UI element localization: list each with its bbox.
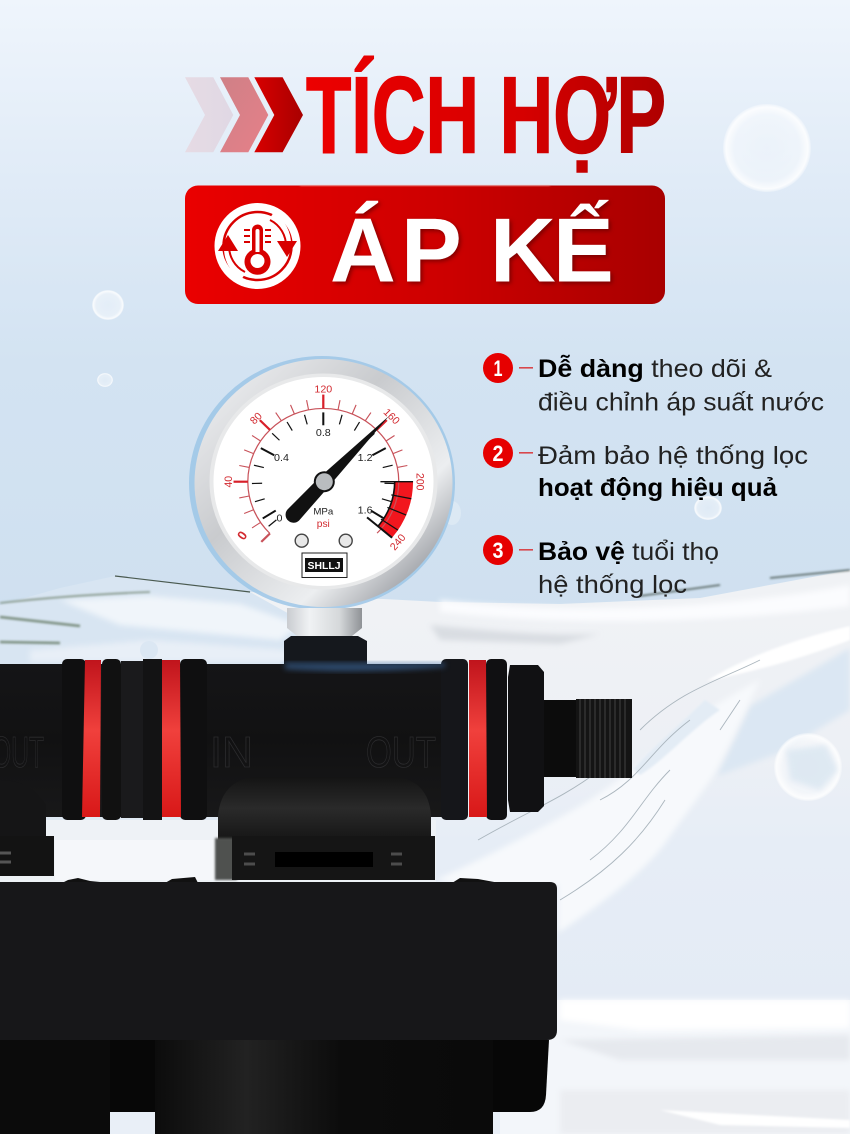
gauge psi labels: 120 [314, 384, 332, 396]
gauge psi scale [217, 378, 430, 585]
banner text: ÁP KẾ [330, 200, 614, 302]
list item 2: 2 [492, 441, 504, 466]
bubbles [92, 104, 842, 801]
gauge MPa labels: 1.6 [358, 505, 373, 516]
filter housing product [0, 608, 632, 1134]
filter cylinder left [0, 1040, 110, 1134]
gauge logo: SHLLJ [308, 560, 341, 572]
gauge psi labels: 240 [388, 532, 409, 553]
gauge MPa labels: 0.8 [316, 427, 331, 439]
embossed labels: IN [210, 728, 253, 777]
icon: thermometer with rotating arrows [214, 203, 300, 289]
list item 2 [483, 438, 808, 502]
list item 3: Bảo vệ tuổi thọ [538, 538, 719, 566]
gauge psi labels: 200 [414, 473, 426, 490]
list item 1 [483, 353, 824, 416]
list item 1: Dễ dàng theo dõi & [538, 353, 772, 383]
list item 2: Đảm bảo hệ thống lọc [538, 442, 808, 470]
gauge MPa scale [252, 412, 395, 526]
pressure gauge [189, 356, 455, 610]
gauge psi labels: 80 [248, 410, 265, 427]
swoosh blue zone [717, 648, 850, 776]
left elbow [0, 780, 54, 876]
embossed labels [0, 728, 436, 777]
gauge psi labels: 40 [223, 476, 235, 487]
gauge screws [295, 534, 352, 547]
mounting clips [62, 877, 505, 884]
gauge red zone [378, 482, 413, 538]
gauge psi labels: 160 [381, 406, 402, 427]
list item 2: hoạt động hiệu quả [538, 474, 778, 502]
gauge logo [302, 553, 347, 578]
gauge MPa labels: 1.2 [358, 452, 373, 464]
filter head block [0, 882, 557, 1040]
gauge MPa labels: MPa [313, 506, 334, 517]
list item 3: 3 [492, 538, 504, 563]
list item 1: 1 [494, 356, 502, 381]
gauge psi labels [223, 384, 426, 553]
list item 3: hệ thống lọc [538, 571, 687, 599]
gauge needle [286, 416, 389, 523]
end nut [508, 665, 544, 812]
title arrows [185, 77, 303, 152]
gauge MPa labels: 0.4 [274, 452, 289, 464]
red bands [82, 660, 487, 817]
swoosh white ribbon [436, 680, 760, 933]
main pipe [0, 659, 507, 820]
gauge connector [284, 608, 367, 672]
list item 3 [483, 535, 719, 599]
blue glow [285, 663, 445, 671]
threaded outlet [544, 699, 632, 778]
gauge MPa labels: 0 [276, 512, 283, 524]
central elbow [215, 777, 435, 880]
gauge psi labels: 0 [234, 528, 250, 543]
title: TÍCH HỢP: TÍCH HỢP [306, 54, 666, 176]
rear filter block [105, 1040, 549, 1112]
list item 1: điều chỉnh áp suất nước [538, 388, 824, 416]
gauge MPa labels [274, 427, 373, 524]
embossed labels: OUT [366, 728, 436, 777]
filter cylinder centre [155, 1040, 493, 1134]
gauge red zone ticks [367, 482, 413, 538]
banner: ÁP KẾ [185, 185, 665, 304]
swoosh white ribbon top [707, 626, 850, 681]
gauge psi labels: psi [317, 519, 330, 530]
